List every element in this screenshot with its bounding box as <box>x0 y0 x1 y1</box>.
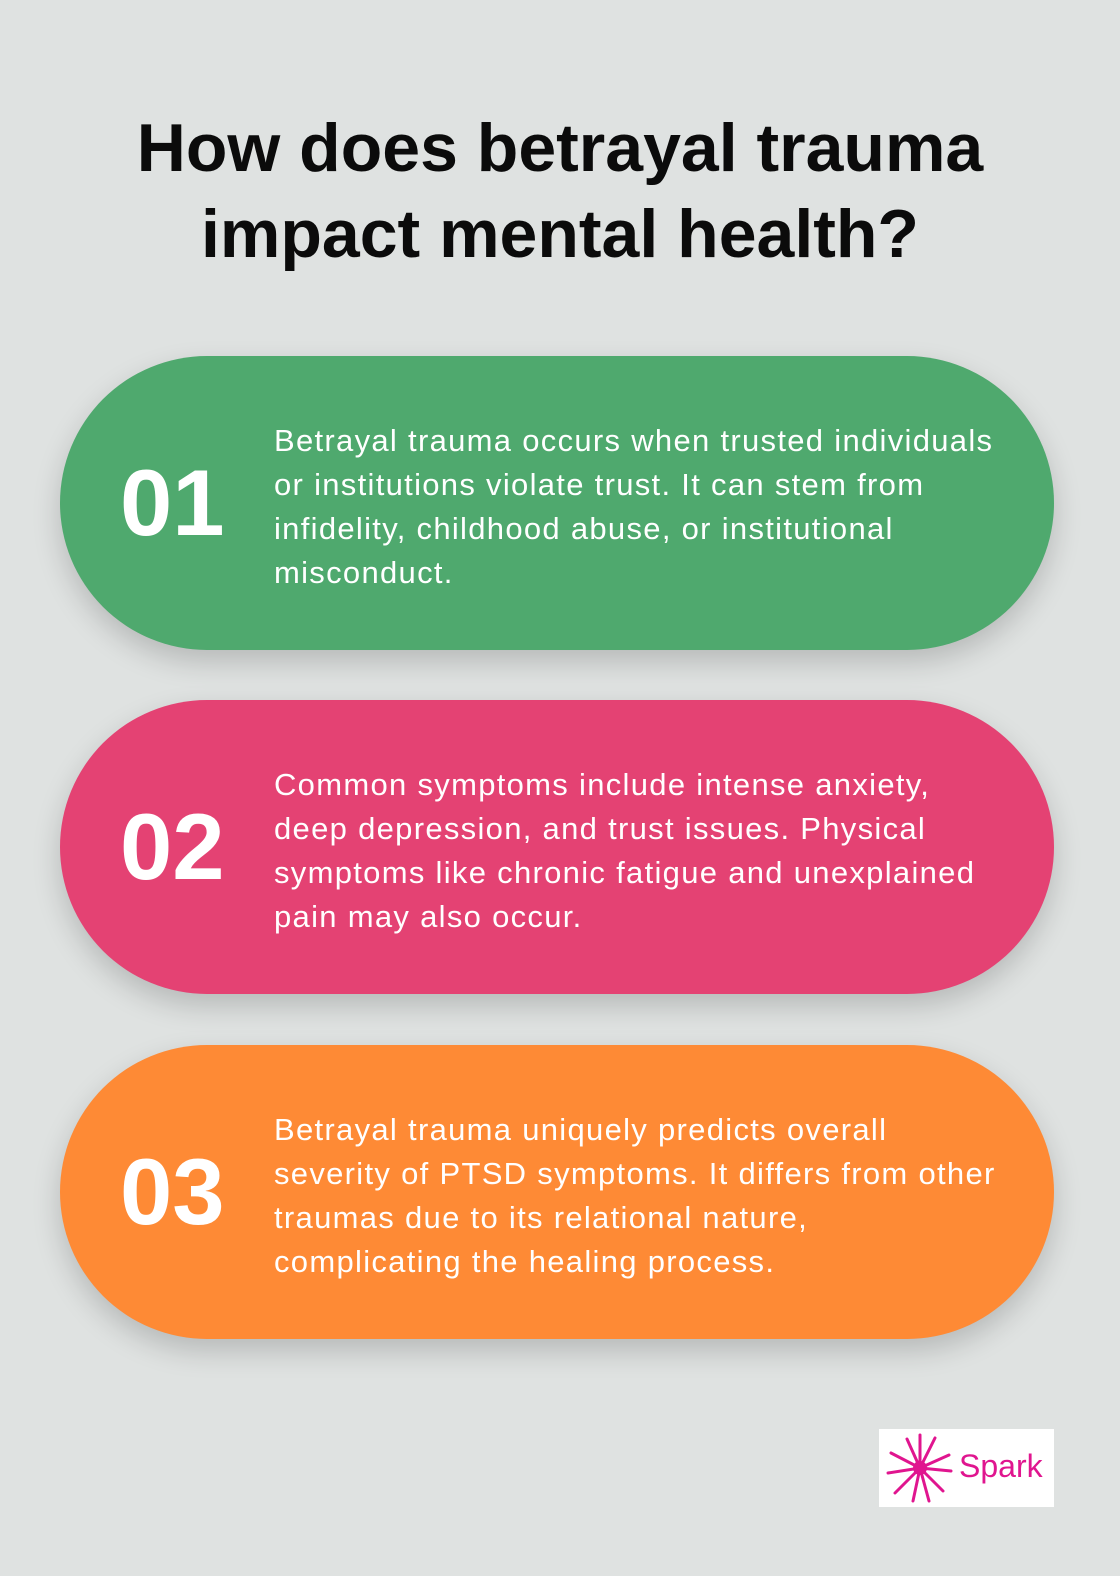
text 02: pain may also occur. <box>274 899 583 934</box>
text 03 <box>274 1112 996 1279</box>
text 03: Betrayal trauma uniquely predicts overall <box>274 1112 887 1147</box>
panel: card 02 <box>60 700 1054 994</box>
number 02: 02 <box>120 794 225 899</box>
text 02: symptoms like chronic fatigue and unexplained <box>274 855 975 890</box>
text 01: misconduct. <box>274 555 454 590</box>
number 01: 01 <box>120 450 225 555</box>
logo: Spark <box>879 1429 1054 1507</box>
title: How does betrayal trauma <box>137 110 983 186</box>
text 01: infidelity, childhood abuse, or institutional <box>274 511 894 546</box>
title <box>137 110 984 272</box>
text 01 <box>274 423 993 590</box>
text 03: complicating the healing process. <box>274 1244 775 1279</box>
text 02 <box>274 767 975 934</box>
text 02: Common symptoms include intense anxiety, <box>274 767 930 802</box>
text 03: traumas due to its relational nature, <box>274 1200 808 1235</box>
text 01: Betrayal trauma occurs when trusted individuals <box>274 423 993 458</box>
title: impact mental health? <box>201 196 919 272</box>
panel: card 03 <box>60 1045 1054 1339</box>
text 03: severity of PTSD symptoms. It differs from other <box>274 1156 996 1191</box>
logo text: Spark <box>959 1448 1043 1484</box>
number 03: 03 <box>120 1139 225 1244</box>
text 01: or institutions violate trust. It can stem from <box>274 467 924 502</box>
icon: starburst <box>886 1434 952 1502</box>
panel: card 01 <box>60 356 1054 650</box>
text 02: deep depression, and trust issues. Physical <box>274 811 926 846</box>
